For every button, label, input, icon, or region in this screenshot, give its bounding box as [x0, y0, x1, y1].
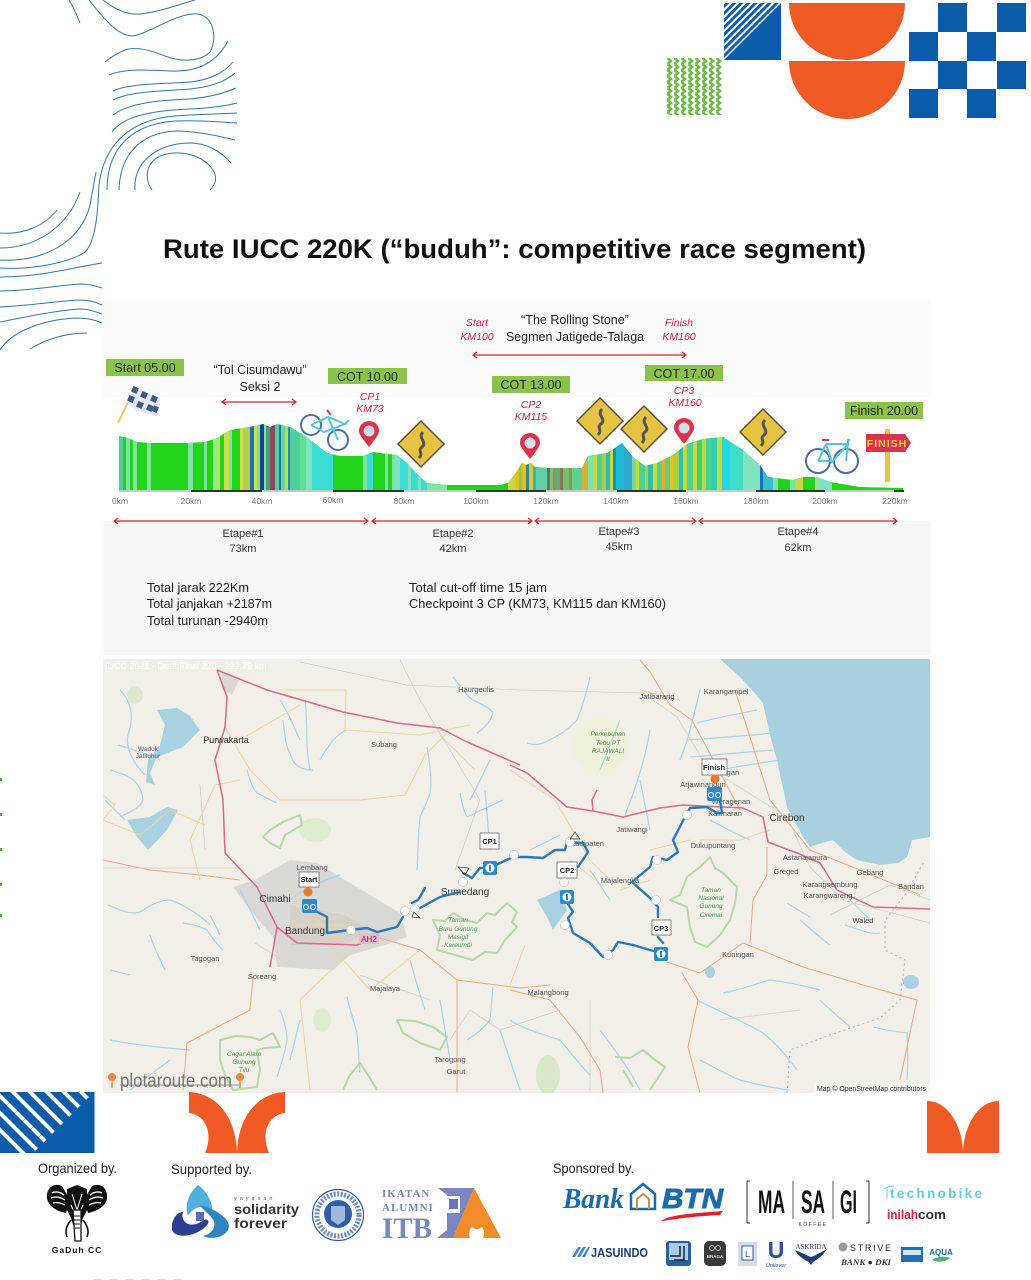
logo: Ikatan Alumni ITB: IKATAN [382, 1188, 430, 1200]
logo: Unilever: Unilever [766, 1263, 787, 1269]
labels: etape names: 62km [785, 542, 811, 554]
note: CP1: CP1 [360, 391, 380, 403]
marker: CP2 [557, 862, 577, 904]
segment note: Tol Cisumdawu: Seksi 2 [240, 380, 281, 394]
labels: etape names: 73km [230, 543, 256, 555]
map labels: Cagar Alam [227, 1051, 262, 1058]
map labels: Jatiluhur [136, 753, 161, 760]
note: CP1: KM73 [356, 403, 384, 415]
icon: winding road sign 3 [621, 406, 667, 452]
map labels: Perkebunan [590, 731, 626, 738]
marker: CP1 [480, 833, 499, 875]
logo: Masagi Koffee [747, 1181, 869, 1228]
x axis track [119, 490, 904, 492]
map labels: IUCC 2021 - Draft Final 220 - 222.79 km [105, 661, 267, 671]
x axis labels: 60km [323, 495, 343, 505]
text: route totals: Total jarak 222Km [147, 580, 249, 595]
marker: start [299, 872, 319, 913]
logo: Ikatan Alumni ITB [382, 1188, 501, 1245]
note: CP3 [668, 385, 702, 409]
segment note: The Rolling Stone: “The Rolling Stone” [521, 313, 629, 327]
map labels: Bandan [898, 882, 924, 891]
map labels: Tilu [239, 1067, 250, 1074]
label: COT 17.00 [645, 365, 723, 381]
map terrain and water [103, 659, 930, 1095]
logo: Jasuindo [572, 1245, 648, 1260]
text: route totals: Total turunan -2940m [147, 613, 268, 628]
decoration: contour lines [0, 0, 237, 350]
labels: etape names [223, 526, 818, 555]
heading: supported by: Supported by. [171, 1162, 252, 1177]
icon: checkered flag [118, 386, 160, 423]
logo: blue square mark [666, 1241, 691, 1266]
map labels: Dukupuntang [691, 841, 735, 850]
logo: inilah.com: inilah [887, 1207, 918, 1222]
note: CP2 [515, 399, 547, 423]
panel: elevation profile [106, 314, 923, 625]
labels: etape names: Etape#1 [223, 528, 263, 540]
map labels: Kuningan [722, 950, 754, 959]
arrow: Rolling Stone span [473, 352, 686, 358]
map labels: Malangbong [527, 988, 569, 997]
label: COT 10.00 [328, 368, 407, 384]
cycling route [308, 800, 722, 957]
heading: sponsored by: Sponsored by. [553, 1161, 634, 1176]
map labels: II [606, 756, 610, 763]
logo: Masagi Koffee: GI [840, 1184, 857, 1220]
logo: Bank DKI: BANK ● DKI [840, 1257, 892, 1267]
map labels: Masigit [448, 934, 469, 941]
watermark: plotaroute: plotaroute.com [120, 1071, 232, 1092]
map labels: Bandung [285, 926, 325, 937]
decoration: orange shape right [927, 1101, 999, 1153]
marker: finish [702, 759, 727, 801]
logo: L mark: L [745, 1249, 750, 1259]
x axis labels: 0km [112, 496, 128, 506]
note: segment start: Start [466, 317, 489, 329]
note: segment finish: Finish [665, 317, 693, 329]
text: cut-off and checkpoints: Total cut-off time 15 jam [409, 580, 547, 595]
map labels: Cirebon [769, 813, 805, 824]
segment note: The Rolling Stone: Segmen Jatigede-Talaga [506, 330, 644, 344]
marker: CP3 [652, 920, 671, 961]
logo: Unilever [766, 1237, 787, 1269]
logo: Aqua: AQUA [929, 1248, 953, 1257]
decoration: left edge marks [0, 778, 2, 917]
marker: CP1: CP1 [482, 837, 497, 846]
map labels: Lembang [296, 863, 328, 872]
map labels: Waduk [138, 746, 159, 753]
map labels: Gunung [699, 903, 723, 910]
x axis labels: 40km [252, 496, 272, 506]
logo: Askrida: ASKRIDA [795, 1243, 827, 1251]
map labels: Taman [701, 887, 721, 894]
map labels: Gebang [857, 868, 883, 877]
map labels: Greged [773, 867, 799, 876]
map labels: Arjawinangun [680, 780, 726, 789]
label: start time [106, 359, 184, 376]
logo: Braga Bike: BRAGA [707, 1254, 724, 1259]
map labels: Kalimaran [708, 809, 742, 818]
logo: solidarity forever: solidarity [234, 1201, 299, 1217]
note: segment start [460, 317, 494, 343]
logo: Ikatan Alumni ITB: ALUMNI [382, 1202, 434, 1214]
icon: finish sign [866, 429, 911, 482]
label: COT 10.00: COT 10.00 [337, 370, 398, 384]
decoration: striped blue square [724, 3, 781, 60]
map labels: Karangsembung [802, 880, 858, 889]
elevation chart [119, 420, 904, 492]
map labels: Subang [371, 740, 397, 749]
map labels: Taman [448, 917, 468, 924]
map labels: Tebu PT [596, 740, 621, 747]
map labels: Majalengka [601, 876, 640, 885]
label: COT 13.00: COT 13.00 [501, 378, 562, 392]
arrow: Tol Cisumdawu span [222, 399, 296, 405]
note: segment finish: KM160 [662, 331, 696, 343]
label: finish time: Finish 20.00 [850, 404, 918, 418]
label: COT 13.00 [492, 376, 570, 393]
logo: Masagi Koffee: KOFFEE [798, 1222, 828, 1228]
map labels: Majalaya [370, 984, 401, 993]
logo: Strive: STRIVE [850, 1243, 893, 1253]
icon: CP2 pin [520, 433, 540, 459]
segment note: Tol Cisumdawu: “Tol Cisumdawu” [213, 363, 307, 377]
heading: organized by: Organized by. [38, 1161, 117, 1176]
arrows: etape spans [114, 518, 897, 524]
attribution: Map © OpenStreetMap contributors [817, 1085, 926, 1093]
map labels: Haurgeulis [458, 685, 494, 694]
marker: CP3: CP3 [654, 924, 668, 933]
x axis labels: 80km [394, 496, 414, 506]
note: CP1 [356, 391, 384, 415]
map labels: Nasional [698, 895, 724, 902]
logo: technobike: technobike [890, 1186, 983, 1201]
logo: Aqua [929, 1248, 953, 1262]
labels: etape names: 42km [440, 543, 466, 555]
icon: winding road sign 2 [577, 398, 623, 444]
map labels: Weragenan [712, 797, 750, 806]
text: cut-off and checkpoints: Checkpoint 3 CP (KM73, KM115 dan KM160) [409, 596, 666, 611]
map labels: Karangampel [704, 687, 749, 696]
x axis labels [112, 495, 908, 506]
label: COT 17.00: COT 17.00 [654, 367, 715, 381]
map labels: Purwakarta [203, 735, 249, 745]
map base [103, 659, 930, 1093]
map labels [105, 661, 924, 1076]
segment note: The Rolling Stone [506, 313, 644, 344]
decoration: orange shape left [189, 1092, 285, 1153]
decoration: orange semicircles [789, 3, 905, 119]
map labels: Tarogong [434, 1055, 466, 1064]
map labels: Soreang [248, 972, 276, 981]
marker: start: Start [300, 875, 318, 884]
map labels: Suragan [711, 768, 739, 777]
labels: etape names: 45km [606, 541, 632, 553]
logo: GaDuh CC [47, 1185, 107, 1255]
x axis labels: 120km [533, 496, 559, 506]
map labels: Tagogan [191, 954, 219, 963]
note: CP3: KM160 [668, 397, 702, 409]
map labels: Buru Gunung [439, 926, 478, 933]
icon: winding road sign 1 [398, 421, 444, 467]
logo: Ikatan Alumni ITB: ITB [382, 1212, 432, 1245]
text: route totals: Total janjakan +2187m [147, 596, 272, 611]
map labels: Garut [447, 1067, 466, 1076]
icon: bicycle 2 [806, 440, 858, 473]
decoration: bottom edge dots [94, 1279, 181, 1280]
x axis labels: 20km [181, 496, 201, 506]
icon: bicycle 1 [301, 410, 349, 450]
logo: GaDuh CC: GaDuh CC [52, 1245, 102, 1255]
logo: inilah.com: com [918, 1207, 946, 1222]
panel background [103, 300, 930, 655]
map labels: RAJAWALI [592, 748, 624, 755]
x axis labels: 140km [603, 496, 629, 506]
note: segment finish [662, 317, 696, 343]
note: segment start: KM100 [460, 331, 494, 343]
x axis labels: 100km [463, 496, 489, 506]
logo: Braga Bike [704, 1241, 726, 1266]
map labels: Karangwareng [804, 891, 852, 900]
map labels: Kadipaten [570, 839, 604, 848]
map labels: Jatibarang [639, 692, 675, 701]
decoration: green zigzag square [666, 58, 722, 115]
logo: Bank BTN [562, 1183, 724, 1221]
icon: finish sign: FINISH [867, 438, 907, 450]
segment note: Tol Cisumdawu [213, 363, 307, 394]
logo: Masagi Koffee: SA [801, 1184, 825, 1220]
title: Rute IUCC 220K (“buduh”: competitive race segment) [163, 234, 866, 264]
map labels: Waled [853, 916, 873, 925]
logo: L mark [738, 1242, 757, 1266]
logo: Bank BTN: BTN [662, 1183, 724, 1214]
logo: solidarity forever [172, 1185, 299, 1238]
map labels: AH2 [361, 935, 377, 944]
x axis labels: 200km [812, 496, 838, 506]
logo: Masagi Koffee: MA [758, 1184, 785, 1220]
logo: blue badge [901, 1247, 923, 1262]
icon: CP3 pin [674, 418, 694, 444]
labels: etape names: Etape#3 [599, 526, 639, 538]
route distance markers [346, 810, 692, 960]
map labels: Kareumbi [444, 942, 472, 949]
note: CP3: CP3 [674, 385, 694, 397]
marker: CP2: CP2 [560, 866, 574, 875]
map labels: Gunung [232, 1059, 256, 1066]
panel: route map [103, 659, 930, 1095]
label: start time: Start 05.00 [114, 361, 176, 375]
logo: solidarity forever: forever [234, 1215, 288, 1231]
labels: etape names: Etape#4 [778, 526, 818, 538]
logo: Jasuindo: JASUINDO [591, 1245, 648, 1260]
map labels: Jatiwangi [616, 825, 648, 834]
x axis labels: 220km [882, 496, 908, 506]
note: CP2: KM115 [515, 411, 547, 423]
decoration: bottom-left striped square [0, 1092, 94, 1153]
logo: Askrida [795, 1243, 827, 1265]
map labels: Astanajapura [783, 853, 828, 862]
x axis labels: 160km [673, 496, 699, 506]
icon: CP1 pin [359, 421, 379, 447]
logo: solidarity forever: yayasan [234, 1196, 276, 1202]
map labels: Sumedang [441, 887, 489, 898]
marker: finish: Finish [703, 763, 725, 772]
text: cut-off and checkpoints [409, 580, 666, 611]
labels: etape names: Etape#2 [433, 528, 473, 540]
map labels: Ciremai [700, 912, 723, 919]
decoration: blue checkerboard [909, 3, 1026, 118]
icon: winding road sign 4 [740, 409, 786, 455]
logo: Bank BTN: Bank [562, 1183, 624, 1215]
x axis labels: 180km [743, 496, 769, 506]
logo: ITB seal [312, 1190, 364, 1240]
map labels: Cimahi [259, 894, 291, 905]
logo: Unilever: U [768, 1237, 784, 1263]
logo: inilah.com [887, 1207, 946, 1222]
note: CP2: CP2 [521, 399, 541, 411]
text: route totals [147, 580, 272, 628]
